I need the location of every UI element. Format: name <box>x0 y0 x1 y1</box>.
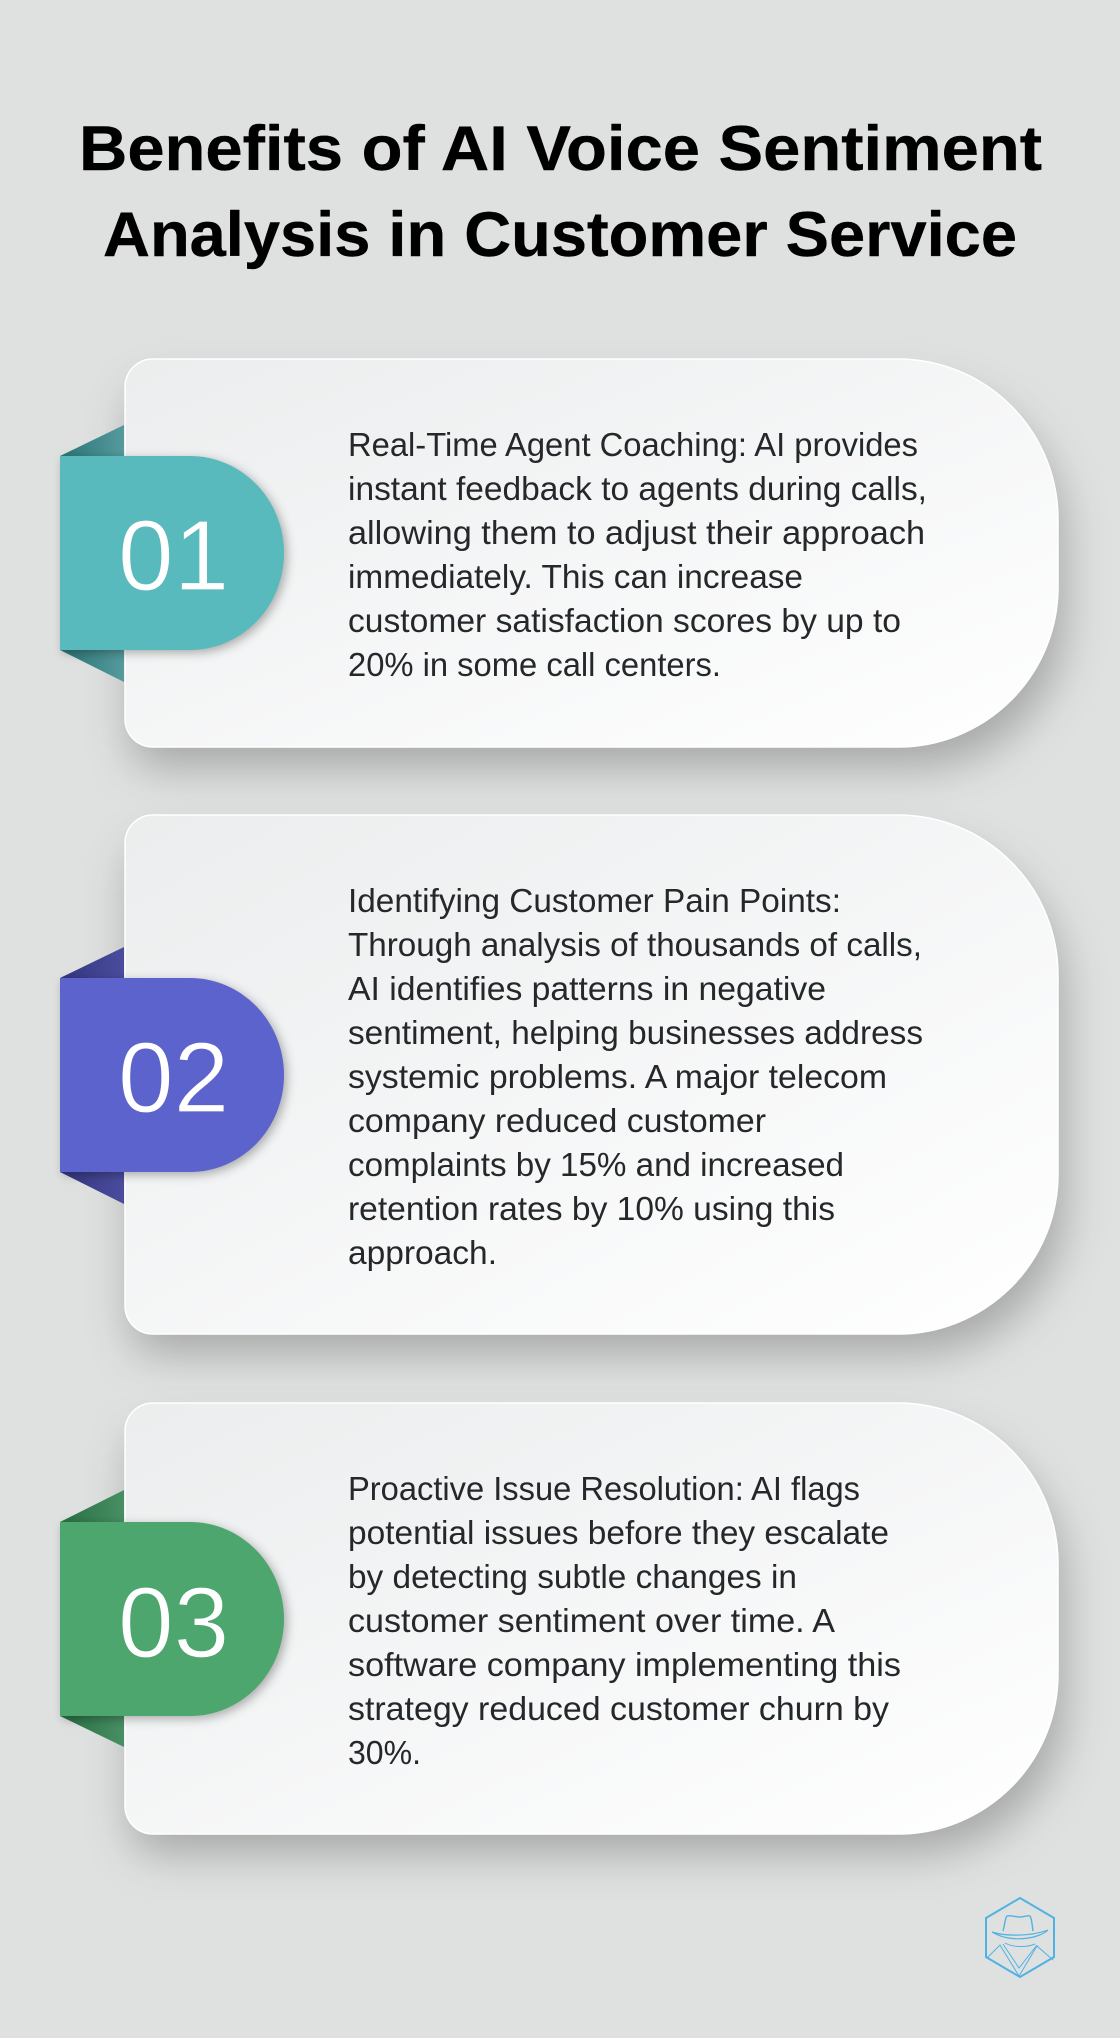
badge shadow <box>63 459 287 653</box>
card shadow <box>131 1433 1064 1853</box>
badge <box>60 978 284 1172</box>
text block: software company implementing this <box>348 1646 901 1683</box>
card <box>125 815 1058 1334</box>
panel: step 3 <box>60 1403 1064 1853</box>
text block: sentiment, helping businesses address <box>348 1014 923 1051</box>
text block: Through analysis of thousands of calls, <box>348 926 922 963</box>
card <box>125 1403 1058 1834</box>
card shadow <box>131 845 1064 1353</box>
text block <box>348 882 923 1271</box>
text block: AI identifies patterns in negative <box>348 970 826 1007</box>
text block: Identifying Customer Pain Points: <box>348 882 841 919</box>
text block: 30%. <box>348 1734 421 1771</box>
text block: strategy reduced customer churn by <box>348 1690 890 1727</box>
ribbon fold top <box>60 425 124 456</box>
title: Analysis in Customer Service <box>103 200 1017 270</box>
text block: customer satisfaction scores by up to <box>348 602 901 639</box>
card shadow <box>131 389 1064 767</box>
text block: approach. <box>348 1234 497 1271</box>
text block: customer sentiment over time. A <box>348 1602 835 1639</box>
text block: allowing them to adjust their approach <box>348 514 925 551</box>
card <box>125 359 1058 747</box>
text block: complaints by 15% and increased <box>348 1146 844 1183</box>
badge shadow <box>63 981 287 1175</box>
ribbon fold bottom <box>60 1172 124 1204</box>
panel: step 2 <box>60 815 1064 1353</box>
number: 03 <box>118 1567 229 1679</box>
icon: logo hexagon with hat figure <box>986 1898 1054 1977</box>
title: Benefits of AI Voice Sentiment <box>79 114 1042 184</box>
text block: instant feedback to agents during calls, <box>348 470 927 507</box>
text block: company reduced customer <box>348 1102 766 1139</box>
text block: by detecting subtle changes in <box>348 1558 797 1595</box>
badge <box>60 456 284 650</box>
text block: immediately. This can increase <box>348 558 803 595</box>
text block: potential issues before they escalate <box>348 1514 889 1551</box>
text block: 20% in some call centers. <box>348 646 721 683</box>
number: 01 <box>118 500 229 612</box>
panel: step 1 <box>60 359 1064 767</box>
ribbon fold bottom <box>60 650 124 682</box>
title <box>79 114 1042 270</box>
badge <box>60 1522 284 1716</box>
text block: retention rates by 10% using this <box>348 1190 835 1227</box>
number: 02 <box>118 1022 229 1134</box>
text block: systemic problems. A major telecom <box>348 1058 887 1095</box>
text block: Real-Time Agent Coaching: AI provides <box>348 426 918 463</box>
text block <box>348 1470 901 1771</box>
badge shadow <box>63 1525 287 1719</box>
text block: Proactive Issue Resolution: AI flags <box>348 1470 860 1507</box>
ribbon fold top <box>60 1490 124 1522</box>
ribbon fold bottom <box>60 1716 124 1747</box>
ribbon fold top <box>60 947 124 978</box>
text block <box>348 426 927 683</box>
